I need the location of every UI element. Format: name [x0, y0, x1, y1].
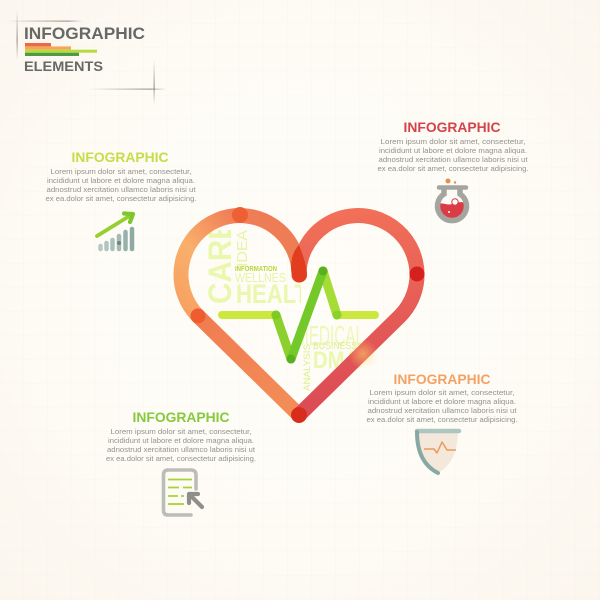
- word cloud: IDEA: [234, 230, 251, 267]
- word cloud: DMA: [313, 347, 359, 374]
- body text: Lorem ipsum dolor sit amet, consectetur,: [380, 137, 526, 146]
- word cloud: [208, 230, 362, 391]
- title: infographic: INFOGRAPHIC: [24, 24, 145, 43]
- heading: INFOGRAPHIC: [132, 409, 230, 425]
- dot: left: [190, 308, 206, 324]
- icon: document: [164, 470, 202, 515]
- heart: left leg: [198, 316, 299, 415]
- body text: incididunt ut labore et dolore magna aliqua.: [47, 176, 195, 185]
- body text: Lorem ipsum dolor sit amet, consectetur,: [50, 167, 192, 176]
- panel: bottom left text: [106, 409, 256, 463]
- icon: flask: [437, 178, 466, 221]
- dot: right: [410, 266, 424, 282]
- panel: left text: [46, 149, 196, 203]
- word cloud: CARE: [202, 220, 238, 304]
- title colour bars: [25, 43, 97, 56]
- word cloud: MEDICAL: [296, 320, 364, 351]
- word cloud: WELLNESS: [235, 270, 293, 285]
- dot: top left: [232, 207, 248, 223]
- body text: incididunt ut labore et dolore magna aliqua.: [368, 397, 516, 406]
- body text: incididunt ut labore et dolore magna aliqua.: [108, 436, 254, 445]
- heart outline: [181, 207, 424, 423]
- title block: [24, 24, 145, 74]
- body text: Lorem ipsum dolor sit amet, consectetur,: [110, 427, 252, 436]
- body text: [378, 137, 528, 173]
- body text: [106, 427, 256, 463]
- body text: ex ea.dolor sit amet, consectetur adipisicing.: [366, 415, 518, 424]
- body text: adnostrud xercitation ullamco laboris nisi ut: [378, 155, 528, 164]
- heart overlap: [291, 245, 307, 282]
- body text: adnostrud xercitation ullamco laboris nisi ut: [107, 445, 255, 454]
- body text: ex ea.dolor sit amet, consectetur adipisicing.: [46, 194, 196, 203]
- dot: bottom: [291, 407, 307, 423]
- panel: top right text: [378, 119, 528, 173]
- icon: growth chart: [97, 214, 133, 249]
- heading: INFOGRAPHIC: [394, 371, 490, 387]
- heading: INFOGRAPHIC: [404, 119, 500, 135]
- body text: [366, 388, 518, 424]
- body text: Lorem ipsum dolor sit amet, consectetur,: [370, 388, 514, 397]
- word cloud: HEALTH: [236, 279, 324, 309]
- body text: [46, 167, 196, 203]
- body text: adnostrud xercitation ullamco laboris nisi ut: [46, 185, 196, 194]
- glow: [348, 339, 378, 369]
- body text: ex ea.dolor sit amet, consectetur adipisicing.: [106, 454, 256, 463]
- heading: INFOGRAPHIC: [72, 149, 168, 165]
- body text: incididunt ut labore et dolore magna aliqua.: [379, 146, 527, 155]
- word cloud: INFORMATION: [235, 266, 277, 273]
- title: elements: ELEMENTS: [24, 58, 103, 74]
- word cloud: BUSINESS: [313, 341, 357, 352]
- icon: shield: [417, 431, 459, 473]
- pulse line: [222, 266, 375, 364]
- word cloud: ANALYSIS: [302, 344, 313, 391]
- heart: right half: [299, 216, 417, 415]
- body text: ex ea.dolor sit amet, consectetur adipisicing.: [378, 164, 528, 173]
- body text: adnostrud xercitation ullamco laboris nisi ut: [368, 406, 516, 415]
- panel: bottom right text: [366, 371, 518, 424]
- heart: left arc: [181, 216, 299, 316]
